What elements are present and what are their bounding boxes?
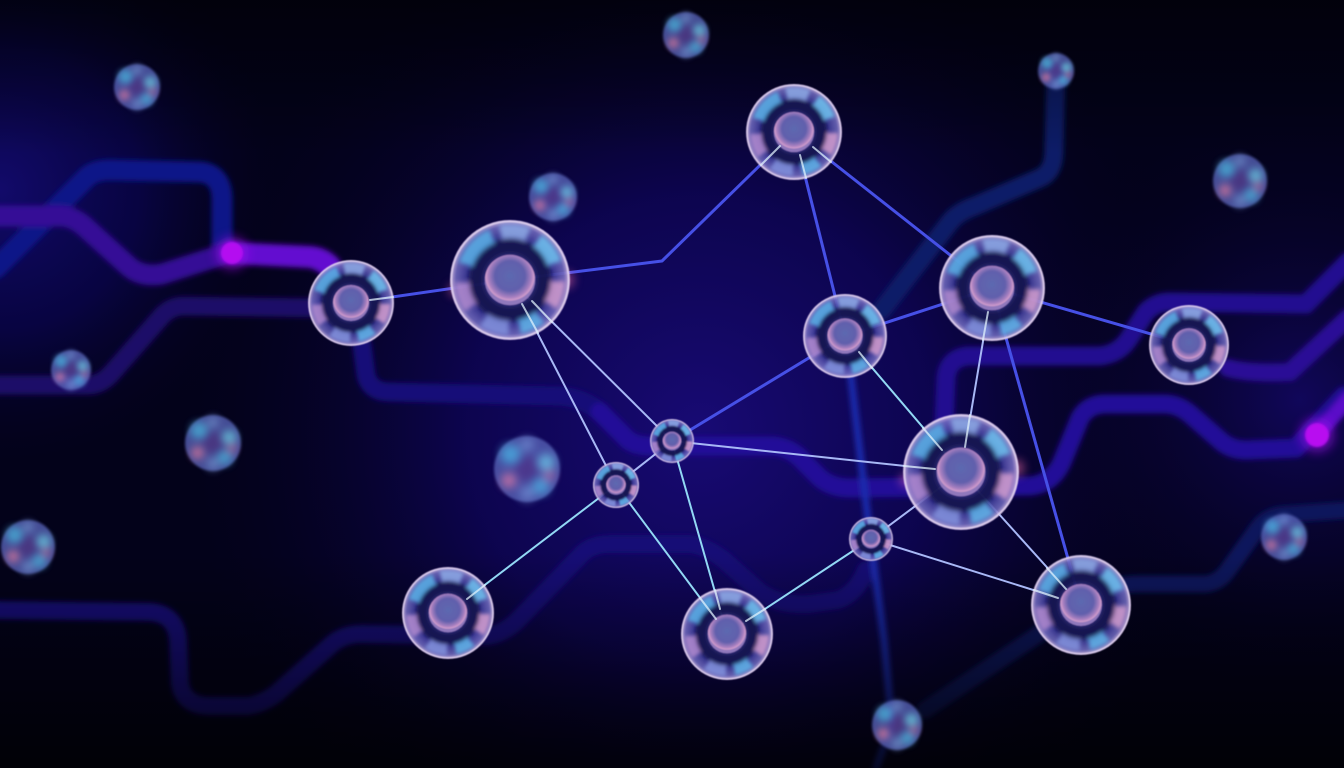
sphere small <box>51 350 91 390</box>
network spheres <box>308 84 1229 680</box>
trace: centre left <box>362 345 600 412</box>
trace: upper right blue <box>882 72 1056 310</box>
trace: lower wide <box>0 544 866 706</box>
sphere small <box>185 415 241 471</box>
sphere large right <box>903 414 1019 530</box>
cyan links <box>448 336 961 634</box>
trace: upper left blue <box>0 170 222 268</box>
junction sphere <box>593 462 639 508</box>
rim glows <box>449 272 1024 486</box>
blue links <box>351 132 1189 605</box>
sphere top <box>746 84 842 180</box>
pale links <box>510 280 1081 605</box>
sphere small <box>529 173 577 221</box>
connection lines <box>351 132 1189 634</box>
sphere far right <box>1149 305 1229 385</box>
bright inner link ends <box>370 146 1066 621</box>
sphere upper right <box>939 235 1045 341</box>
trace: lower right blue <box>925 510 1344 710</box>
trace: bright segment <box>232 253 330 266</box>
junction sphere <box>650 419 694 463</box>
sphere far left <box>308 260 394 346</box>
sphere small <box>1038 53 1074 89</box>
sphere centre <box>803 294 887 378</box>
sphere small <box>1213 154 1267 208</box>
sphere small <box>663 12 709 58</box>
sphere lower centre <box>681 588 773 680</box>
sphere small <box>872 700 922 750</box>
trace: right upper <box>944 262 1344 425</box>
trace: left mid dim <box>0 306 320 385</box>
trace: centre long <box>600 396 1344 488</box>
trace: right short <box>1228 318 1344 372</box>
sphere large left <box>450 220 570 340</box>
trace: upper left magenta <box>0 216 330 275</box>
sphere small <box>494 436 560 502</box>
sphere small <box>114 64 160 110</box>
junction sphere <box>849 517 893 561</box>
glow dots <box>215 236 1335 453</box>
sphere small <box>1261 514 1307 560</box>
trace: vertical blue <box>846 336 892 768</box>
trace: bright right diagonal <box>1317 400 1344 435</box>
sphere small <box>1 520 55 574</box>
sphere lower right <box>1031 555 1131 655</box>
sphere lower left <box>402 567 494 659</box>
